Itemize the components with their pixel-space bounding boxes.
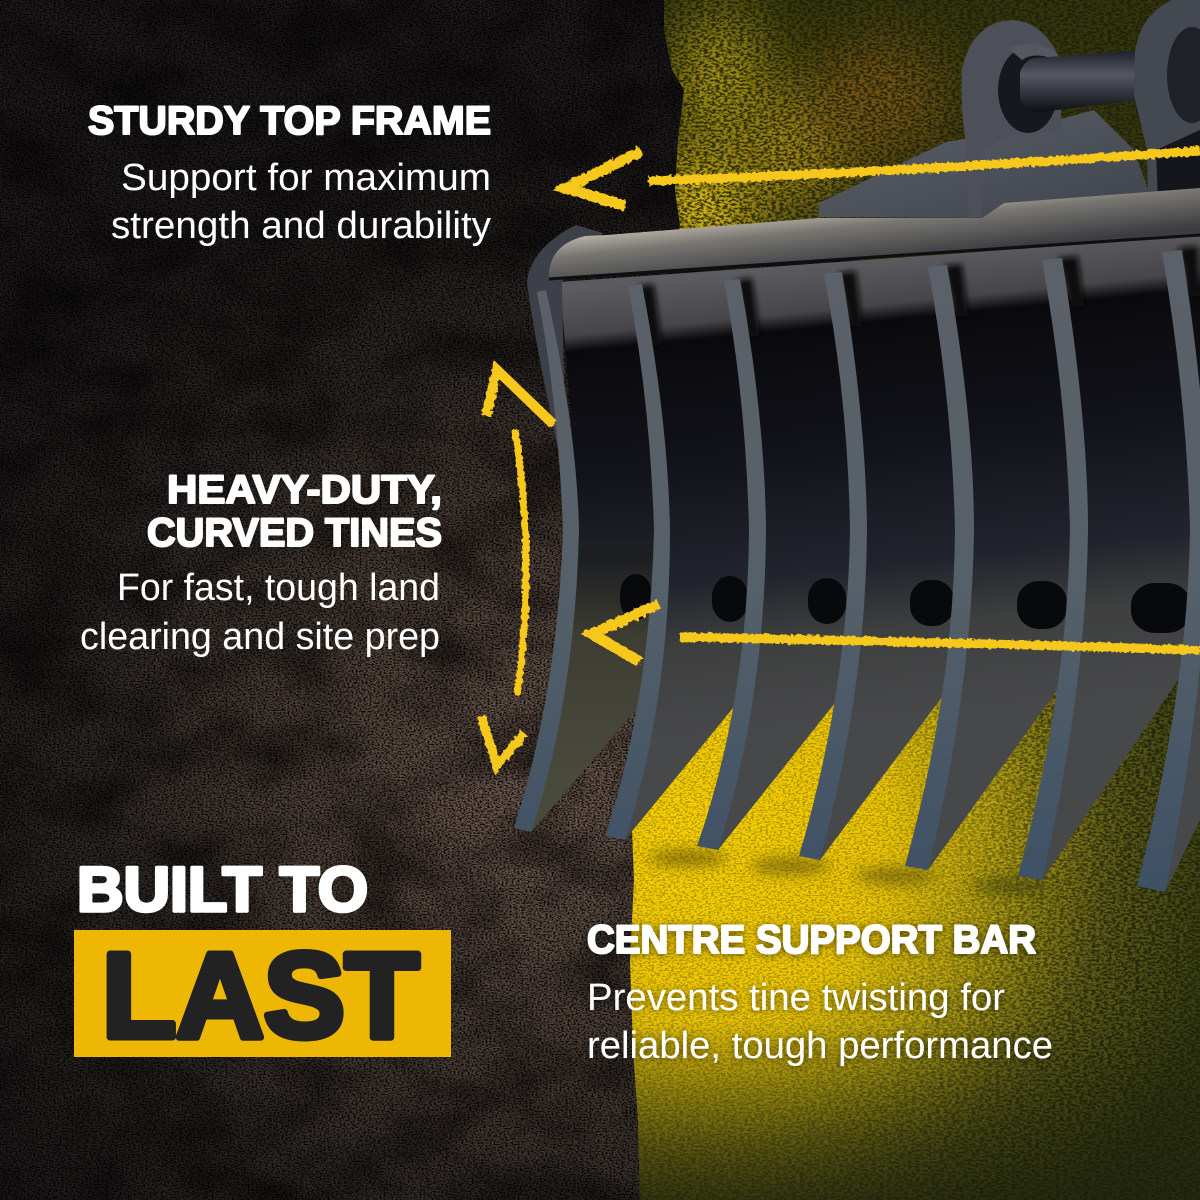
description: reliable, tough performance bbox=[587, 1025, 1053, 1067]
arrow: curved tines double-headed bbox=[481, 370, 553, 766]
rake attachment: sturdy top frame bar bbox=[549, 188, 1200, 278]
heading: CENTRE SUPPORT BAR bbox=[587, 918, 1036, 962]
second lug ear bbox=[1134, 0, 1200, 203]
rake attachment: back plate and blades bbox=[531, 236, 1200, 892]
rake attachment: outermost olive blade bbox=[531, 540, 654, 832]
rake attachment: tine cast shadows on back plate bbox=[638, 246, 1200, 345]
arrow: top frame pointer bbox=[566, 151, 1200, 206]
description bbox=[111, 157, 491, 247]
rake attachment: curved tines bbox=[514, 250, 1200, 892]
cross pin bbox=[1020, 50, 1140, 112]
rake attachment: left side plate bbox=[527, 225, 603, 480]
first lug ear bbox=[962, 20, 1062, 217]
description: strength and durability bbox=[111, 205, 491, 247]
first lug boss bbox=[998, 44, 1060, 133]
description bbox=[80, 567, 440, 658]
background: lower yellow grunge patch bbox=[620, 660, 1200, 1200]
title highlight box: LAST bbox=[102, 927, 419, 1063]
description bbox=[587, 977, 1053, 1067]
background: upper yellow grunge patch bbox=[650, 0, 1200, 265]
description: clearing and site prep bbox=[80, 616, 440, 658]
rake attachment: bolts on centre support bar bbox=[620, 574, 1191, 633]
description: Support for maximum bbox=[121, 157, 491, 199]
heading bbox=[147, 468, 442, 555]
description: Prevents tine twisting for bbox=[587, 977, 1005, 1019]
heading: HEAVY-DUTY, bbox=[167, 468, 442, 512]
heading: STURDY TOP FRAME bbox=[88, 99, 491, 143]
title: built to last bbox=[74, 855, 451, 1063]
base gusset plate bbox=[819, 110, 1150, 218]
heading: CURVED TINES bbox=[147, 511, 442, 555]
rake attachment: mounting lugs and pin bbox=[819, 0, 1200, 218]
callout: sturdy top frame bbox=[88, 99, 491, 247]
description: For fast, tough land bbox=[117, 567, 440, 609]
title line one: BUILT TO bbox=[77, 855, 368, 925]
arrow: centre support bar pointer bbox=[592, 604, 1200, 662]
callout: heavy-duty curved tines bbox=[80, 468, 442, 658]
callout: centre support bar bbox=[587, 918, 1053, 1067]
